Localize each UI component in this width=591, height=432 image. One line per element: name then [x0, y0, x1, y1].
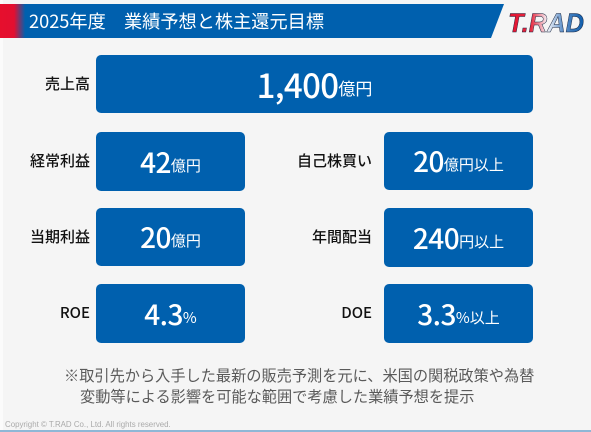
bottom line [0, 430, 591, 432]
value: 4.3%: 4.3 [144, 294, 183, 334]
value: 3.3%以上: 3.3 [417, 294, 456, 334]
footnote: ※取引先から入手した最新の販売予測を元に、米国の関税政策や為替 [64, 364, 534, 386]
row: 当期利益 [30, 208, 245, 266]
value: 240円以上: 240 [413, 218, 459, 258]
label: 年間配当: 年間配当 [312, 226, 372, 247]
value: 4.3% [96, 284, 245, 343]
copyright: Copyright © T.RAD Co., Ltd. All rights reserved. [5, 420, 171, 429]
value: 20億円: 億円 [171, 230, 201, 251]
value: 3.3%以上 [384, 284, 533, 343]
header band [0, 4, 504, 38]
value: 20億円: 20 [140, 217, 171, 257]
row: 自己株買い [297, 132, 533, 190]
label: DOE: DOE [341, 302, 372, 323]
value: 1,400億円: 1,400 [257, 60, 338, 108]
value: 20億円 [96, 208, 245, 266]
value: 1,400億円 [96, 55, 533, 113]
left margin strip [0, 0, 3, 432]
label: 売上高: 売上高 [45, 73, 90, 94]
value: 240円以上 [384, 208, 533, 267]
value: 3.3%以上: %以上 [456, 306, 500, 328]
value: 240円以上: 円以上 [459, 230, 504, 252]
value: 42億円: 42 [140, 142, 171, 182]
row: DOE [341, 284, 533, 343]
footnote: 変動等による影響を可能な範囲で考慮した業績予想を提示 [80, 384, 474, 406]
footnote [64, 364, 534, 406]
row: 売上高 [45, 55, 533, 113]
title: 2025年度 業績予想と株主還元目標 [29, 8, 324, 34]
row: 年間配当 [312, 208, 533, 267]
value: 42億円 [96, 132, 245, 191]
value: 1,400億円: 億円 [338, 75, 372, 100]
value: 20億円以上: 20 [413, 141, 444, 181]
label: 当期利益: 当期利益 [30, 226, 90, 247]
row: 経常利益 [30, 132, 245, 191]
value: 20億円以上: 億円以上 [444, 154, 504, 175]
label: 自己株買い: 自己株買い [297, 150, 372, 171]
row: ROE [60, 284, 245, 343]
label: 経常利益: 経常利益 [30, 150, 90, 171]
value: 20億円以上 [384, 132, 533, 190]
value: 4.3%: % [183, 306, 197, 328]
value: 42億円: 億円 [171, 154, 201, 176]
label: ROE: ROE [60, 302, 90, 323]
